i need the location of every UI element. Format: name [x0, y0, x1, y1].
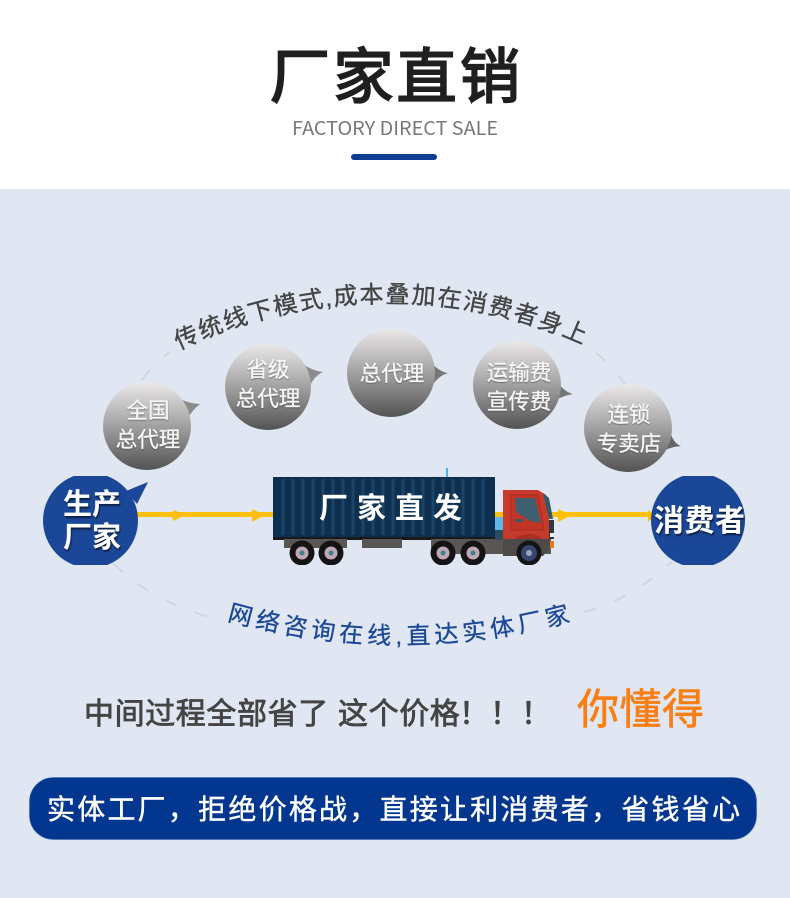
circle: 生产厂家: 生产 [63, 488, 121, 521]
bubble: 连锁专卖店 [584, 384, 681, 472]
bubble: 全国总代理: 总代理 [116, 428, 180, 452]
title underline [351, 154, 437, 160]
bubble: 运输费宣传费 [473, 341, 573, 429]
wheels [290, 540, 542, 566]
bubble: 省级总代理: 省级 [246, 358, 290, 382]
bubble: 省级总代理 [225, 344, 323, 430]
cab [503, 490, 554, 556]
container: 厂家直发 [319, 492, 462, 525]
bottom banner: 实体工厂，拒绝价格战，直接让利消费者，省钱省心 [47, 794, 740, 825]
mask below truck [280, 565, 550, 572]
curved heading: online consultation: 网络咨询在线,直达实体厂家 [228, 602, 570, 648]
truck [273, 468, 554, 572]
bubble: 连锁专卖店: 连锁 [607, 403, 651, 427]
curved heading: traditional model: 传统线下模式,成本叠加在消费者身上 [174, 282, 586, 350]
bubble: 连锁专卖店: 专卖店 [597, 432, 661, 456]
circle: 消费者 [651, 474, 745, 568]
circle: 生产厂家 [43, 473, 148, 568]
dashed arcs [113, 352, 672, 618]
bubble: 全国总代理: 全国 [126, 399, 170, 423]
bubble: 运输费宣传费: 宣传费 [487, 390, 551, 414]
bubble: 省级总代理: 总代理 [236, 387, 300, 411]
main panel background [0, 189, 790, 898]
bubble: 全国总代理 [103, 382, 200, 470]
circle: 生产厂家: 厂家 [63, 521, 121, 554]
bottom banner [30, 778, 756, 840]
bubble: 运输费宣传费: 运输费 [487, 361, 551, 385]
trailer chassis [273, 530, 551, 554]
highlighted words: 你懂得 [577, 686, 704, 733]
bubble: 总代理 [347, 329, 448, 417]
bubble: 总代理: 总代理 [360, 362, 424, 386]
circle: 消费者: 消费者 [654, 505, 745, 538]
subtitle: FACTORY DIRECT SALE [292, 114, 498, 141]
title: 厂家直销 [270, 44, 520, 111]
yellow arrow line [136, 509, 656, 522]
header section [0, 0, 790, 189]
container [273, 477, 495, 537]
exhaust detail [446, 468, 448, 478]
slogan: 中间过程全部省了这个价格！！！ [84, 698, 551, 731]
